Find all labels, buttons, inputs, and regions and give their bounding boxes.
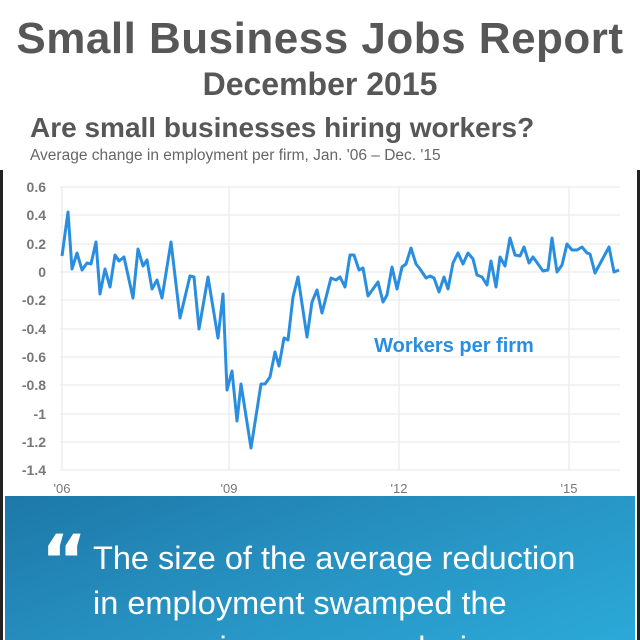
y axis labels: -1.2 [22, 434, 46, 450]
title: Small Business Jobs Report [16, 14, 624, 63]
x axis labels: '15 [561, 481, 577, 496]
y axis labels: -0.4 [22, 321, 46, 337]
subtitle date: December 2015 [203, 66, 437, 102]
chart question heading: Are small businesses hiring workers? [30, 112, 534, 143]
y axis labels: 0.4 [27, 207, 46, 223]
quote text: in employment swamped the [93, 585, 507, 621]
line chart [22, 179, 620, 496]
quote text: The size of the average reduction [93, 540, 575, 576]
series label: Workers per firm [374, 335, 534, 357]
quote text [93, 540, 575, 640]
y axis labels: -0.6 [22, 349, 46, 365]
y axis labels [22, 179, 46, 478]
y axis labels: -0.8 [22, 377, 46, 393]
x axis labels [54, 481, 577, 496]
y axis labels: 0 [38, 264, 46, 280]
y axis labels: 0.6 [27, 179, 46, 195]
chart description: Average change in employment per firm, Jan. '06 – Dec. '15 [30, 147, 441, 164]
data line: workers per firm [62, 212, 619, 448]
y axis labels: -0.2 [22, 292, 46, 308]
x axis labels: '12 [391, 481, 407, 496]
x axis labels: '09 [221, 481, 237, 496]
y axis labels: -1 [34, 406, 46, 422]
side borders [0, 170, 3, 640]
quote mark icon: “ [41, 520, 87, 602]
y axis labels: 0.2 [27, 236, 46, 252]
y axis labels: -1.4 [22, 462, 46, 478]
quote panel [5, 496, 635, 640]
x axis labels: '06 [54, 481, 70, 496]
